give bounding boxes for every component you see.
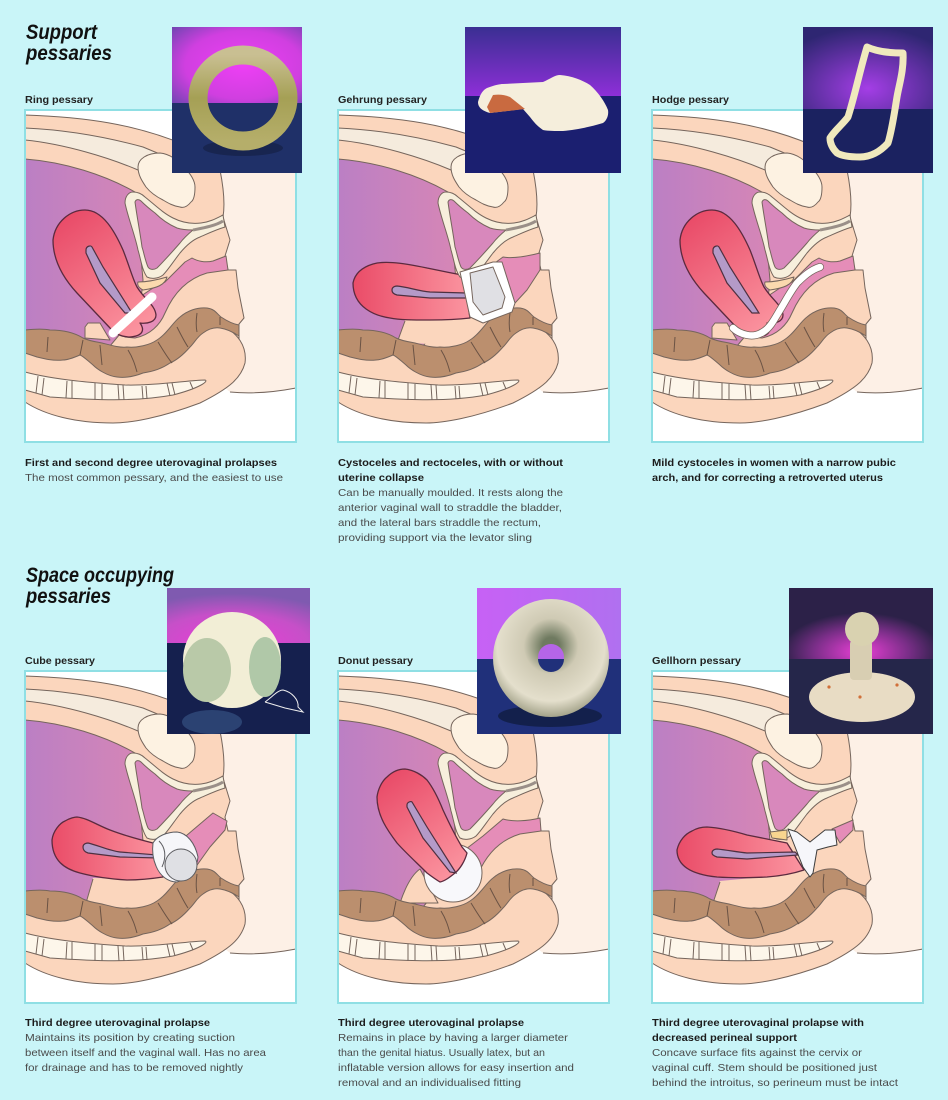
caption: gehrung pessary: providing support via the levator sling [338,532,532,544]
caption: hodge pessary: arch, and for correcting a retroverted uterus [652,472,883,484]
photo: hodge pessary [803,27,933,173]
heading: space occupying pessaries: pessaries [25,585,111,608]
caption: donut pessary [338,1017,574,1089]
label: gehrung pessary: Gehrung pessary [338,94,427,106]
caption: donut pessary: Remains in place by having a larger diameter [338,1032,569,1044]
caption: ring pessary: First and second degree uterovaginal prolapses [25,457,277,469]
photo: gehrung pessary [465,27,621,173]
caption: donut pessary: Third degree uterovaginal prolapse [338,1017,524,1029]
caption: gellhorn pessary: Third degree uterovaginal prolapse with [652,1017,864,1029]
heading: support pessaries: Support [26,21,98,44]
panel: hodge pessary [652,27,933,484]
caption: hodge pessary [652,457,896,484]
caption: gellhorn pessary [652,1017,898,1089]
caption: gehrung pessary: and the lateral bars straddle the rectum, [338,517,541,529]
label: hodge pessary: Hodge pessary [652,94,729,106]
heading: support pessaries: pessaries [25,42,112,65]
caption: cube pessary: between itself and the vaginal wall. Has no area [25,1047,266,1059]
pessary: ring in place [113,297,152,333]
pessary: donut in place [424,844,482,902]
anatomy diagram: cube pessary [25,671,296,1003]
caption: gehrung pessary: Can be manually moulded. It rests along the [338,487,563,499]
caption: cube pessary: for drainage and has to be removed nightly [25,1062,244,1074]
caption: ring pessary: The most common pessary, and the easiest to use [25,472,283,484]
caption: gehrung pessary [338,457,564,544]
anatomy diagram: gellhorn pessary [652,671,923,1003]
panel: donut pessary [338,588,621,1089]
pessary: gehrung in place [460,262,515,323]
label: donut pessary: Donut pessary [338,655,413,667]
caption: gellhorn pessary: vaginal cuff. Stem should be positioned just [652,1062,877,1074]
caption: gellhorn pessary: behind the introitus, so perineum must be intact [652,1077,898,1089]
pessary: gellhorn in place [788,829,837,877]
label: cube pessary: Cube pessary [25,655,95,667]
panel: gellhorn pessary [652,588,933,1089]
label: ring pessary: Ring pessary [25,94,93,106]
uterus: anteverted [377,769,467,882]
caption: hodge pessary: Mild cystoceles in women with a narrow pubic [652,457,896,469]
caption: cube pessary [25,1017,266,1074]
heading: support pessaries [25,21,112,65]
anatomy diagram: donut pessary [338,671,609,1003]
caption: gellhorn pessary: decreased perineal support [652,1032,798,1044]
caption: cube pessary: Maintains its position by creating suction [25,1032,235,1044]
caption: donut pessary: inflatable version allows for easy insertion and [338,1062,574,1074]
heading: space occupying pessaries [25,564,174,608]
photo: gellhorn pessary [789,588,933,734]
panel: cube pessary [25,588,310,1074]
anatomy diagram: gehrung pessary [338,110,609,442]
caption: donut pessary: removal and an individualised fitting [338,1077,521,1089]
caption: donut pessary: than the genital hiatus. Usually latex, but an [338,1047,545,1059]
caption: gellhorn pessary: Concave surface fits against the cervix or [652,1047,863,1059]
caption: gehrung pessary: anterior vaginal wall to straddle the bladder, [338,502,562,514]
label: gellhorn pessary: Gellhorn pessary [652,655,741,667]
anatomy diagram: hodge pessary [652,110,923,442]
caption: gehrung pessary: uterine collapse [338,472,424,484]
anatomy diagram: ring pessary [25,110,296,442]
pessary: hodge in place [733,267,820,336]
panel: ring pessary [25,27,302,484]
caption: cube pessary: Third degree uterovaginal prolapse [25,1017,210,1029]
photo: donut pessary [477,588,621,734]
panel: gehrung pessary [338,27,621,544]
caption: ring pessary [25,457,283,484]
pessary: cube in place [153,832,198,882]
heading: space occupying pessaries: Space occupying [26,564,174,587]
caption: gehrung pessary: Cystoceles and rectoceles, with or without [338,457,564,469]
photo: ring pessary [172,27,302,173]
photo: cube pessary [167,588,310,734]
